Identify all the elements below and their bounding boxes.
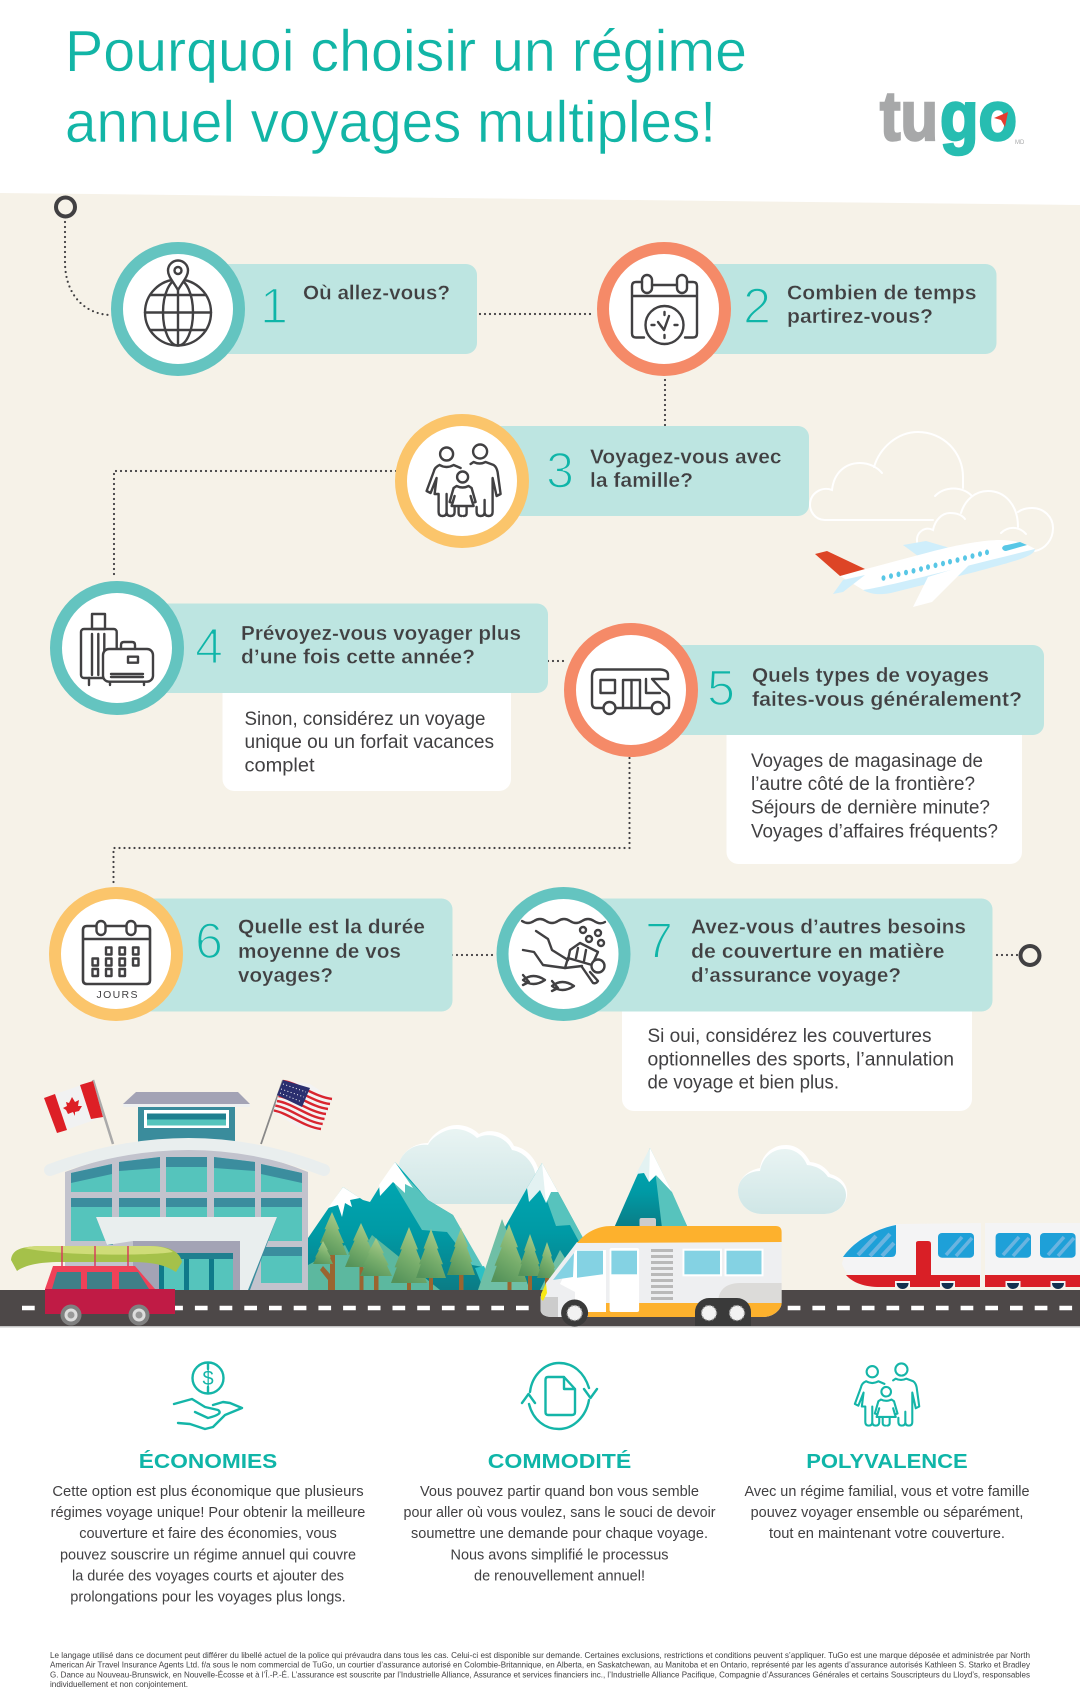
text: commodité body: soumettre une demande pour chaque voyage. bbox=[411, 1526, 708, 1542]
fine print: Le langage utilisé dans ce document peut différer du libellé actuel de la police qui prévaudra dans tous les cas. Celui-ci est disponible sur demande. Certaines exclusions, restrictions et conditions peuvent s’appliquer. TuGo est une marque déposée et administrée par North bbox=[50, 1650, 1030, 1660]
step 5: 5 bbox=[707, 660, 735, 716]
text: step 7 note: optionnelles des sports, l’annulation bbox=[648, 1050, 954, 1070]
text: step 5 note: Voyages de magasinage de bbox=[751, 751, 983, 772]
title: annuel voyages multiples! bbox=[65, 90, 716, 155]
text: step 4 note: complet bbox=[244, 756, 315, 776]
fine print: American Air Travel Insurance Agents Ltd. f/a sous le nom commercial de TuGo, un courtier d’assurance autorisé en Colombie-Britannique, en Alberta, en Saskatchewan, au Manitoba et en Ontario, représenté par les agents d’assurance autorisés Kathleen S. Starko et Bradley bbox=[50, 1660, 1031, 1670]
text: step 5 note bbox=[751, 751, 998, 842]
fine print bbox=[50, 1650, 1031, 1689]
landscape bbox=[0, 1080, 1080, 1328]
step 3 bbox=[401, 420, 809, 542]
step 4 bbox=[56, 587, 548, 791]
logo: tugo bbox=[880, 77, 1025, 155]
benefit: Polyvalence: POLYVALENCE bbox=[806, 1450, 968, 1473]
clouds outline bbox=[810, 432, 1053, 551]
icon: globe bbox=[145, 260, 211, 346]
step 7 bbox=[502, 893, 992, 1111]
benefit: Commodité: COMMODITÉ bbox=[488, 1450, 631, 1473]
text: step 5 note: Voyages d’affaires fréquents? bbox=[751, 822, 998, 842]
text: économies body: prolongations pour les voyages plus longs. bbox=[70, 1590, 346, 1606]
step 7: 7 bbox=[645, 913, 673, 969]
text: polyvalence body bbox=[744, 1484, 1030, 1542]
text: step 7 note bbox=[648, 1026, 954, 1094]
cloud bbox=[398, 1125, 540, 1204]
text: économies body: pouvez souscrire un régime annuel qui couvre bbox=[60, 1548, 356, 1564]
camper van bbox=[540, 1218, 782, 1326]
text: step 7 note: Si oui, considérez les couvertures bbox=[648, 1026, 932, 1047]
benefit: Polyvalence bbox=[744, 1363, 1030, 1542]
train bbox=[842, 1223, 1080, 1289]
step 6: Quelle est la durée bbox=[238, 916, 425, 938]
step 2: 2 bbox=[743, 278, 771, 334]
step 5: Quels types de voyages bbox=[752, 664, 989, 687]
step 6: moyenne de vos bbox=[238, 940, 401, 963]
logo: tugo: tu bbox=[880, 77, 938, 155]
icon: family teal bbox=[855, 1363, 919, 1426]
step 5 bbox=[570, 629, 1044, 864]
step 1 bbox=[117, 248, 477, 370]
text: step 4 note bbox=[244, 709, 494, 776]
icon: calendar jours: JOURS bbox=[96, 989, 138, 1001]
text: step 4 note: Sinon, considérez un voyage bbox=[244, 709, 486, 730]
text: step 5 note: l’autre côté de la frontière? bbox=[751, 774, 975, 795]
text: économies body: couverture et faire des économies, vous bbox=[79, 1526, 337, 1542]
fine print: G. Dance au Nouveau-Brunswick, en Nouvelle-Écosse et à l’Î.-P.-É. L’assurance est souscrite par l’Industrielle Alliance, Assurance et services financiers inc., l’Industrielle Alliance Pacifique, Compagnie d’Assurances Générales et certains Souscripteurs du Lloyd’s, responsables bbox=[50, 1670, 1030, 1680]
step 6 bbox=[55, 893, 452, 1015]
text: commodité body bbox=[404, 1484, 716, 1584]
title bbox=[65, 19, 747, 155]
text: polyvalence body: Avec un régime familial, vous et votre famille bbox=[744, 1484, 1030, 1500]
step 3: la famille? bbox=[590, 469, 693, 492]
step 6: 6 bbox=[195, 913, 223, 969]
step 2 bbox=[603, 248, 996, 370]
step 6: voyages? bbox=[238, 964, 333, 987]
trees bbox=[313, 1212, 557, 1290]
flag: Canada bbox=[44, 1080, 113, 1144]
airport building bbox=[50, 1092, 324, 1290]
icon: calendar with clock bbox=[632, 275, 697, 344]
step 1: Où allez-vous? bbox=[303, 282, 450, 304]
text: commodité body: Nous avons simplifié le processus bbox=[450, 1548, 668, 1564]
step 2: partirez-vous? bbox=[787, 305, 933, 328]
icon: camper bbox=[592, 670, 669, 714]
title: Pourquoi choisir un régime bbox=[65, 19, 747, 84]
step 3: 3 bbox=[546, 442, 574, 498]
icon: hand with dollar bbox=[174, 1362, 242, 1429]
flag: USA bbox=[261, 1080, 332, 1144]
road bbox=[0, 1290, 1080, 1328]
airplane bbox=[815, 540, 1035, 607]
text: économies body: la durée des voyages courts et ajouter des bbox=[72, 1568, 344, 1584]
car with canoe bbox=[11, 1246, 182, 1326]
text: économies body: régimes voyage unique! Pour obtenir la meilleure bbox=[51, 1505, 365, 1521]
text: polyvalence body: tout en maintenant votre couverture. bbox=[769, 1526, 1005, 1542]
icon: calendar jours bbox=[83, 921, 150, 1001]
text: économies body: Cette option est plus économique que plusieurs bbox=[52, 1484, 364, 1500]
icon: family bbox=[427, 444, 501, 516]
text: polyvalence body: pouvez voyager ensemble ou séparément, bbox=[751, 1505, 1023, 1521]
text: commodité body: de renouvellement annuel! bbox=[474, 1568, 645, 1584]
text: step 5 note: Séjours de dernière minute? bbox=[751, 798, 990, 818]
step 4: Prévoyez-vous voyager plus bbox=[241, 622, 521, 645]
icon: luggage bbox=[81, 614, 153, 685]
benefit: Économies bbox=[51, 1362, 365, 1606]
connector paths bbox=[56, 198, 1040, 965]
text: économies body bbox=[51, 1484, 365, 1606]
cloud bbox=[738, 1145, 847, 1214]
step 7: Avez-vous d’autres besoins bbox=[691, 916, 966, 938]
step 4: d’une fois cette année? bbox=[241, 646, 475, 668]
step 7: de couverture en matière bbox=[691, 940, 944, 963]
text: commodité body: pour aller où vous voulez, sans le souci de devoir bbox=[404, 1505, 716, 1521]
step 7: d’assurance voyage? bbox=[691, 964, 901, 987]
text: commodité body: Vous pouvez partir quand bon vous semble bbox=[420, 1484, 699, 1500]
step 3: Voyagez-vous avec bbox=[590, 446, 782, 468]
logo: tugo: go bbox=[940, 77, 1017, 155]
benefit: Commodité bbox=[404, 1363, 716, 1584]
fine print: individuellement et non conjointement. bbox=[50, 1679, 188, 1689]
text: step 4 note: unique ou un forfait vacances bbox=[244, 732, 494, 753]
logo: tugo: MD bbox=[1015, 140, 1025, 146]
beige panel bbox=[0, 193, 1080, 1292]
text: step 7 note: de voyage et bien plus. bbox=[648, 1072, 839, 1094]
benefit: Économies: ÉCONOMIES bbox=[139, 1450, 277, 1473]
step 2: Combien de temps bbox=[787, 282, 976, 304]
icon: scuba diver bbox=[522, 919, 605, 991]
icon: hand with dollar: $ bbox=[202, 1368, 214, 1390]
icon: renewal document bbox=[522, 1363, 597, 1429]
mountains bbox=[308, 1148, 688, 1290]
step 4: 4 bbox=[195, 618, 223, 674]
step 1: 1 bbox=[260, 278, 288, 334]
step 5: faites-vous généralement? bbox=[752, 688, 1022, 711]
